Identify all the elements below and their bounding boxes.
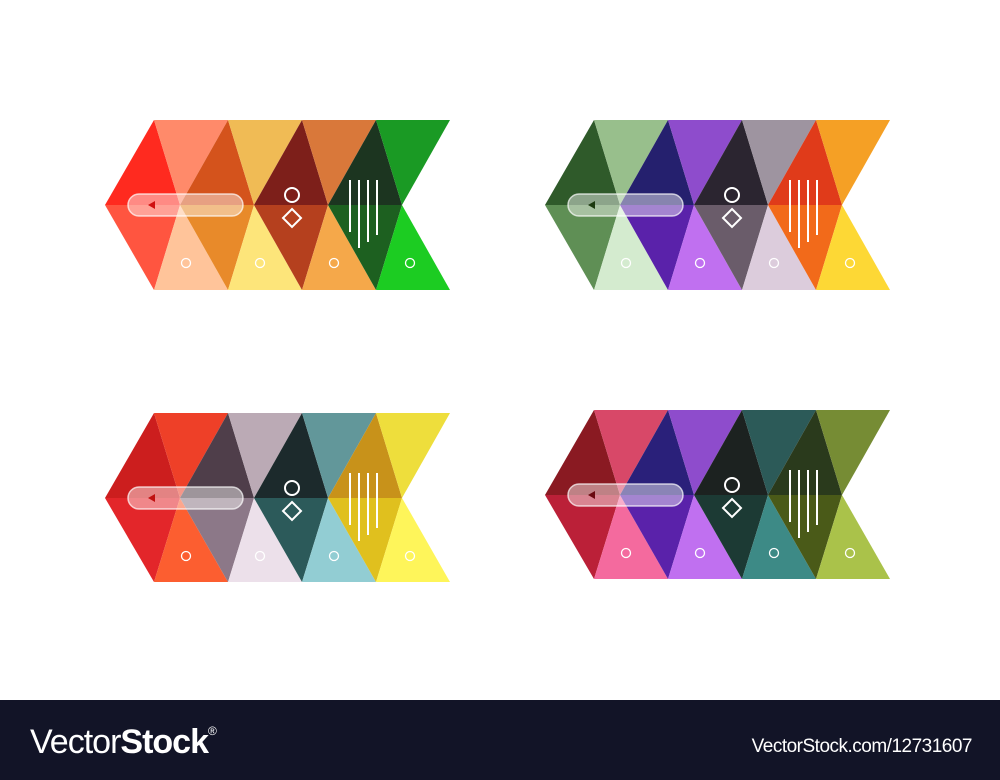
- arrow 1: warm: [105, 120, 450, 290]
- arrow 4: pink purple olive: [545, 410, 890, 579]
- footer bar: [0, 700, 1000, 780]
- arrow 2: green purple orange: [545, 120, 890, 290]
- footer bar: VectorStock.com/12731607: [752, 736, 972, 757]
- arrow 3: red teal yellow: [105, 413, 450, 582]
- footer bar: VectorStock: [30, 723, 208, 761]
- footer bar: ®: [208, 724, 217, 738]
